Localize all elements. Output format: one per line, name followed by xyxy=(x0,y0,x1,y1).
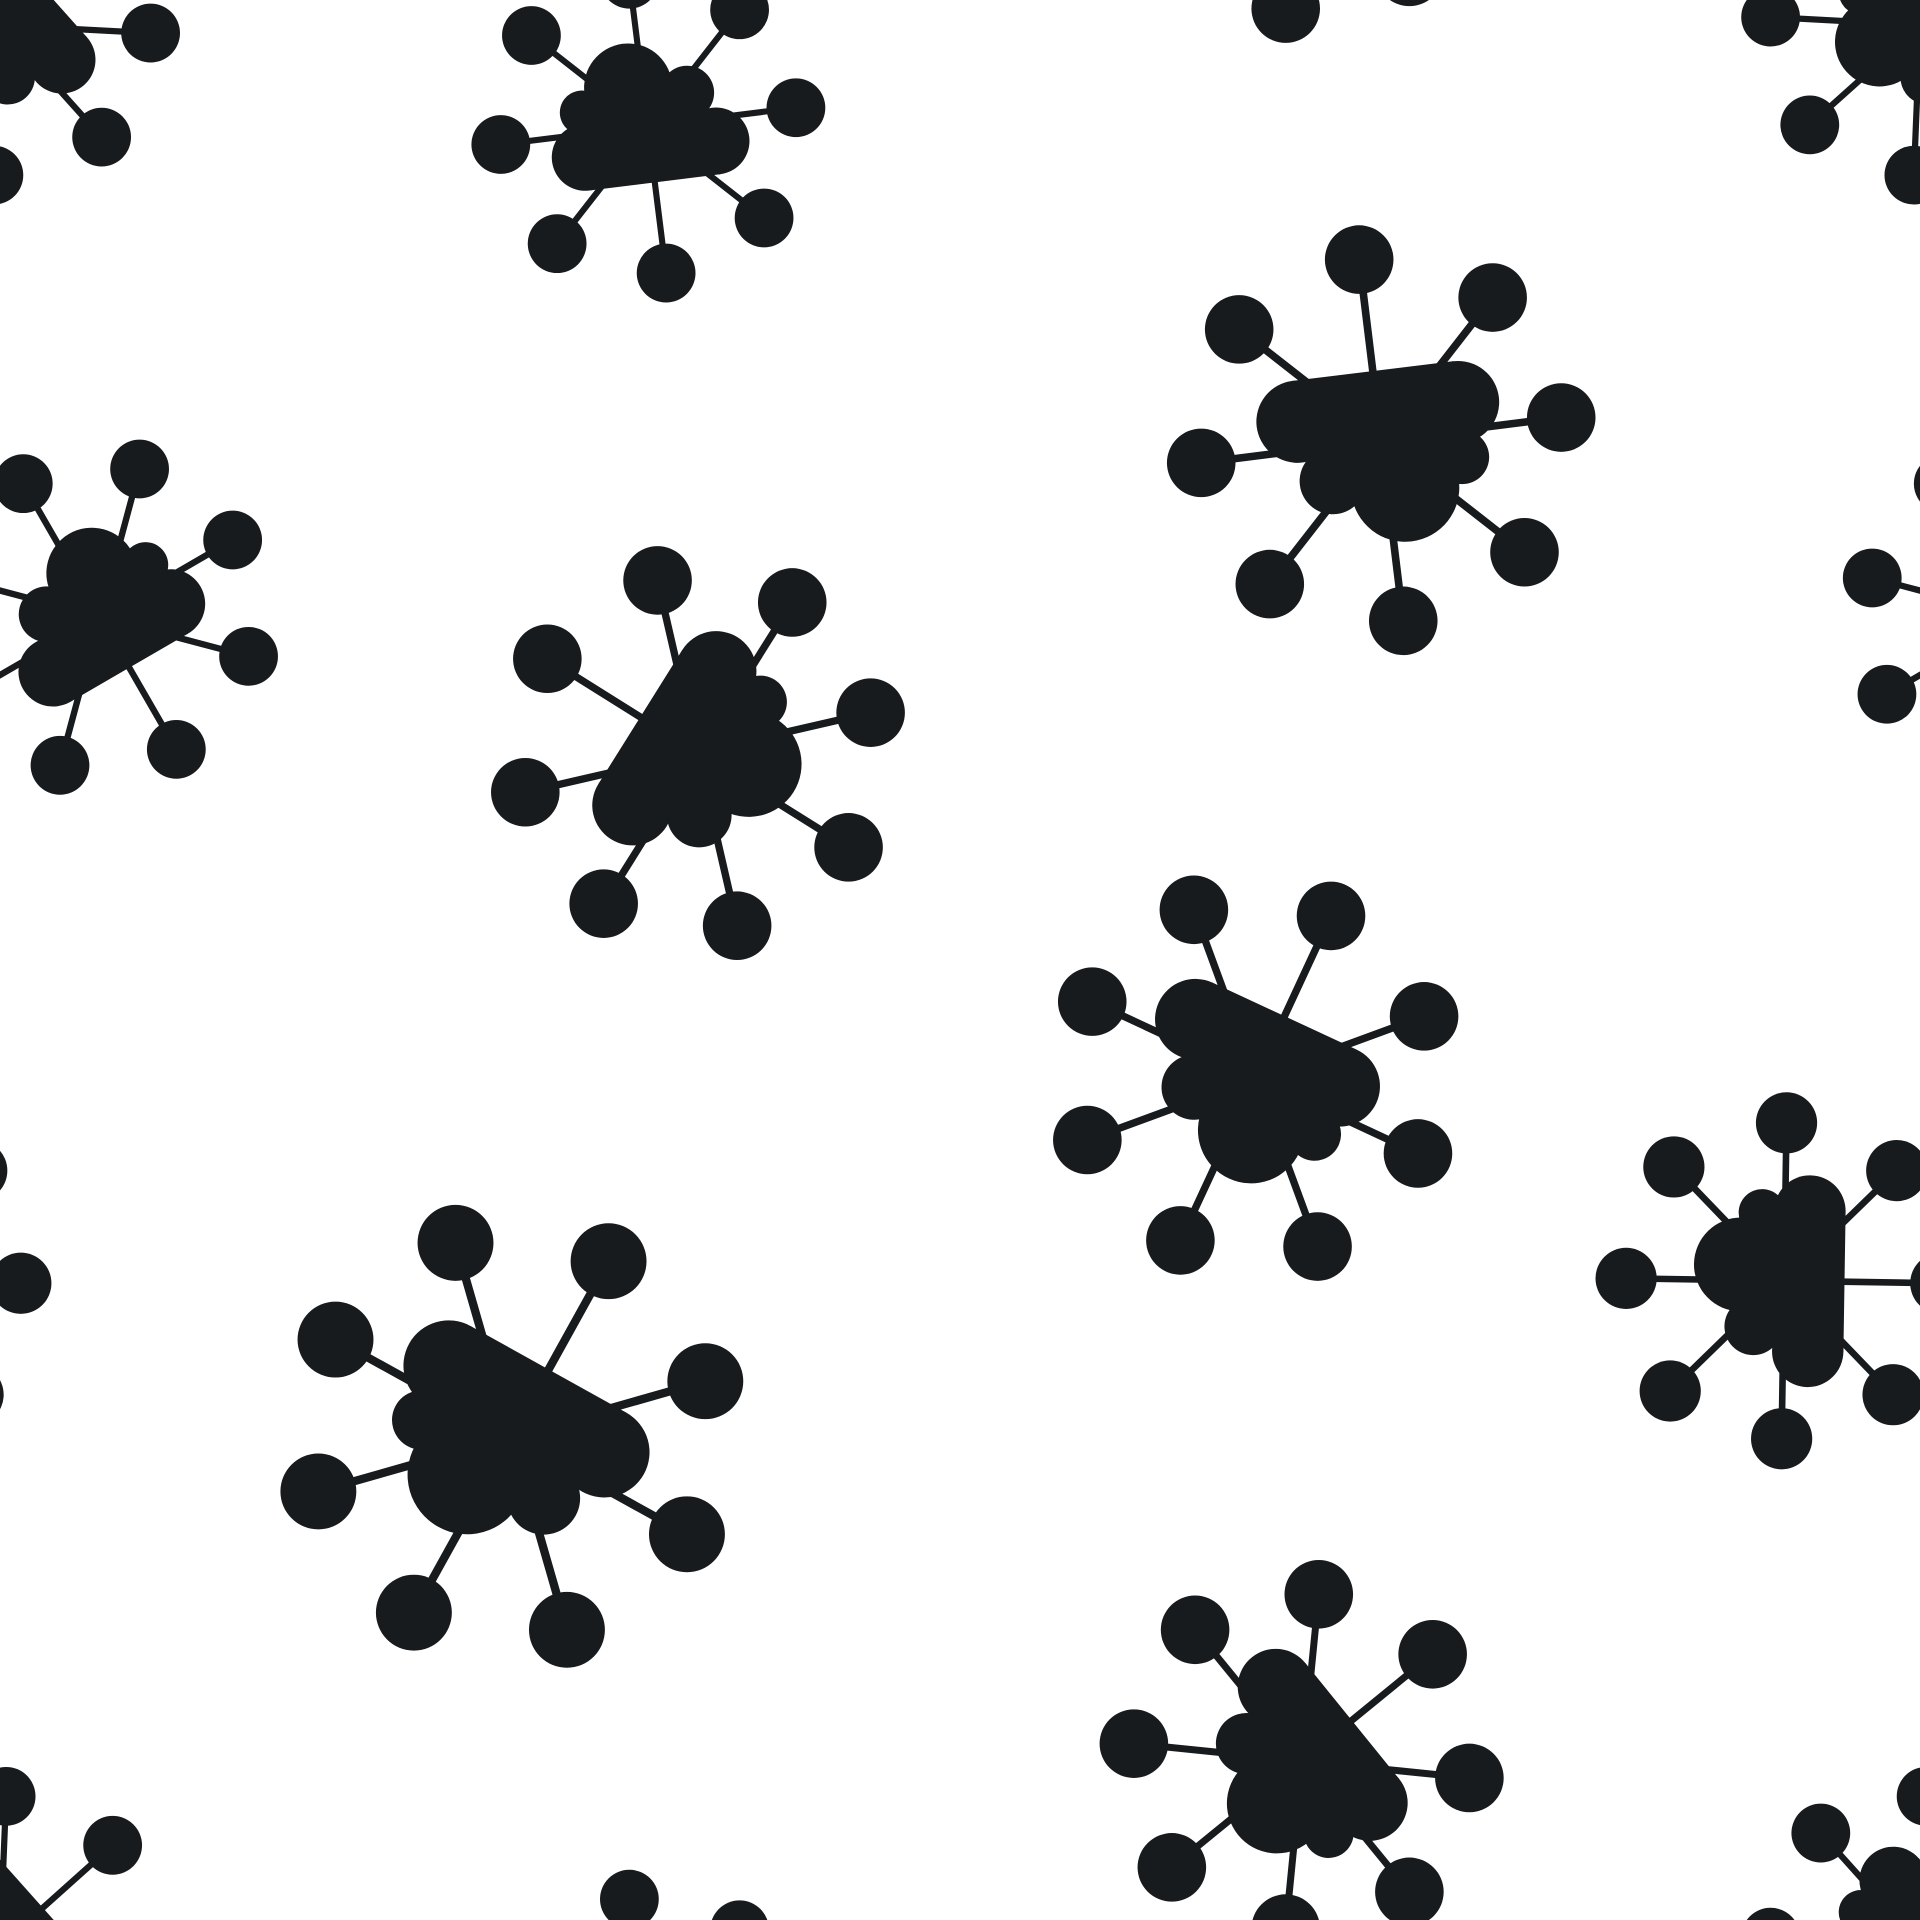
virus: top centre, wrapped to bottom edge xyxy=(471,1870,825,1920)
virus: right, wrapped to left edge xyxy=(0,1092,51,1469)
virus: centre xyxy=(491,546,905,960)
virus: upper right xyxy=(1167,225,1596,655)
virus: left middle xyxy=(0,440,278,795)
virus: corner wrap, bottom right xyxy=(1741,1767,1920,1920)
virus: large lower left xyxy=(280,1205,743,1668)
virus: top centre xyxy=(471,0,825,302)
virus: top left corner xyxy=(0,0,180,204)
virus: bottom right of centre xyxy=(1100,1560,1504,1920)
virus: left middle, wrapped to right edge xyxy=(1843,440,1920,795)
virus: centre right xyxy=(1053,876,1458,1281)
virus: corner wrap, bottom left xyxy=(0,1767,180,1920)
virus: right xyxy=(1596,1092,1920,1469)
virus: corner wrap, top right xyxy=(1741,0,1920,204)
virus: bottom right of centre, wrapped to top edge xyxy=(1100,0,1504,43)
